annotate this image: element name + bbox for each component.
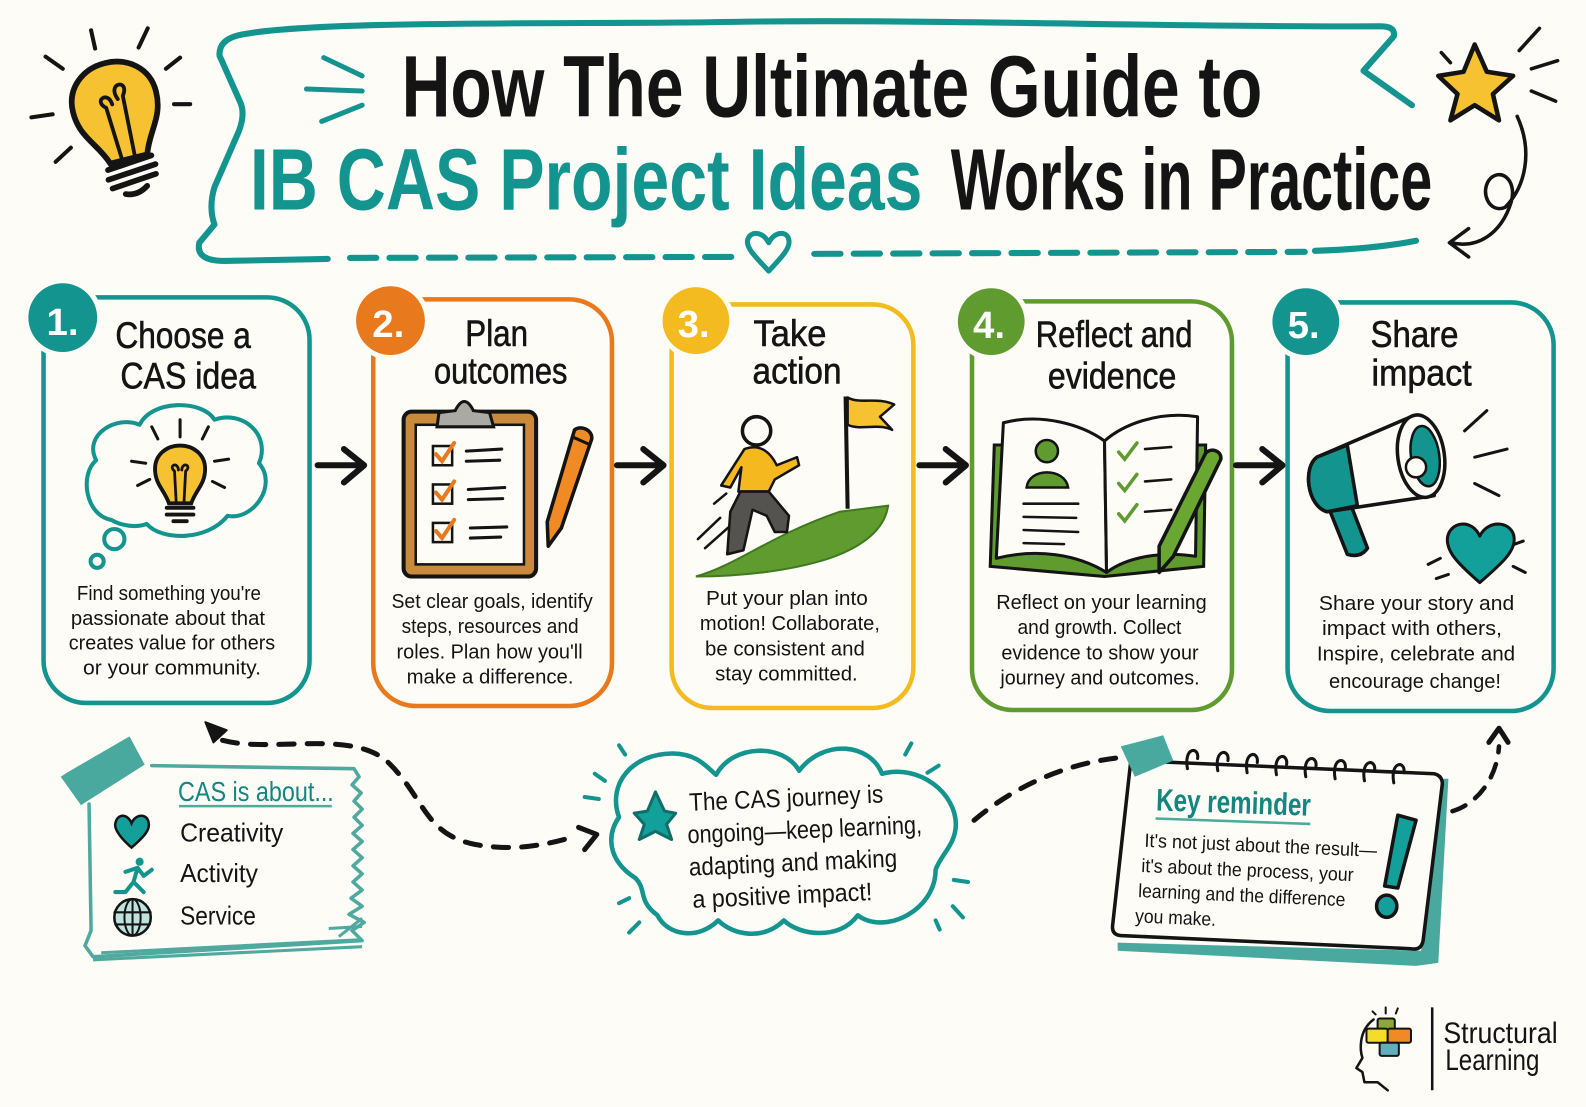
callout: CAS journey cloud xyxy=(585,743,968,934)
item: creativity: Creativity xyxy=(180,818,284,848)
arrow: dashed to key reminder xyxy=(974,758,1121,820)
step number 1 xyxy=(23,278,102,357)
logo: Structural Learning: Learning xyxy=(1445,1044,1539,1077)
logo: Structural Learning: Structural xyxy=(1443,1017,1558,1050)
heading: key reminder: Key reminder xyxy=(1156,782,1311,823)
icon: clipboard and pencil xyxy=(404,402,592,577)
item: activity xyxy=(115,858,259,892)
logo: Structural Learning xyxy=(1356,1007,1558,1090)
arrow: dashed to step 5 xyxy=(1452,728,1508,811)
text step 3: Put your plan into xyxy=(706,588,868,610)
text: reminder message: It's not just about the result— xyxy=(1144,831,1378,862)
text: journey message: ongoing—keep learning, xyxy=(687,811,923,849)
icon: exclamation mark xyxy=(1377,815,1416,917)
text step 5: encourage change! xyxy=(1329,671,1501,693)
heading step 1 xyxy=(115,314,256,396)
text: journey message: adapting and making xyxy=(688,845,898,882)
text step 2: make a difference. xyxy=(407,667,574,689)
tape xyxy=(61,736,145,805)
heading step 4: evidence xyxy=(1048,354,1176,396)
icon: star xyxy=(634,792,676,839)
panel: key reminder notebook xyxy=(1113,735,1448,966)
text step 2 xyxy=(391,591,594,689)
item: service: Service xyxy=(180,900,256,930)
icon: heart on banner xyxy=(747,233,789,271)
icon: open journal with pen xyxy=(990,415,1221,577)
text step 5: Inspire, celebrate and xyxy=(1317,643,1515,665)
text step 2: roles. Plan how you'll xyxy=(397,641,583,663)
text step 1 xyxy=(69,583,275,680)
step number 3 xyxy=(657,282,734,359)
text step 5: Share your story and xyxy=(1319,593,1514,615)
text step 2: Set clear goals, identify xyxy=(391,591,594,613)
text: reminder message: you make. xyxy=(1135,906,1216,931)
heading step 5: Share xyxy=(1371,313,1459,355)
arrow: dashed to step 1 xyxy=(205,722,597,850)
step number 1: 1. xyxy=(47,301,79,344)
text: journey message xyxy=(686,779,925,914)
step number 4 xyxy=(953,283,1030,360)
heading step 1: Choose a xyxy=(115,314,251,356)
heading step 5: impact xyxy=(1372,351,1472,393)
panel: step 4 reflect and evidence xyxy=(953,283,1232,710)
text step 5 xyxy=(1317,593,1515,693)
panel: CAS is about xyxy=(61,736,364,960)
panel: step 5 share impact xyxy=(1267,283,1554,711)
heading step 2 xyxy=(434,312,567,391)
icon: cloud rays xyxy=(585,743,968,933)
step number 4: 4. xyxy=(973,304,1005,347)
step number 5: 5. xyxy=(1288,304,1320,347)
text: reminder message xyxy=(1135,831,1378,938)
heading: CAS is about: CAS is about... xyxy=(178,776,334,807)
text step 4 xyxy=(996,592,1207,690)
text step 5: impact with others, xyxy=(1322,618,1502,640)
arrow: curl to steps xyxy=(1449,116,1526,257)
title line 1: How The Ultimate Guide to xyxy=(402,38,1262,135)
heading step 4 xyxy=(1036,313,1193,396)
icon: megaphone with heart xyxy=(1309,411,1525,583)
item: service xyxy=(114,899,256,936)
arrow: step 4 to 5 xyxy=(1236,449,1283,482)
icon: star with rays xyxy=(1438,28,1558,120)
icon: thought cloud with bulb xyxy=(87,405,266,568)
text step 3: motion! Collaborate, xyxy=(700,613,880,635)
text step 1: Find something you're xyxy=(77,583,261,605)
text step 3: be consistent and xyxy=(705,638,865,660)
icon: climber with flag on hill xyxy=(696,396,894,577)
icon: light bulb xyxy=(31,28,190,203)
heading step 3: action xyxy=(753,349,842,391)
step number 2: 2. xyxy=(372,303,404,346)
heading step 5 xyxy=(1371,313,1472,393)
tape xyxy=(1121,735,1173,777)
heading step 1: CAS idea xyxy=(120,354,256,396)
arrow: step 3 to 4 xyxy=(919,449,966,482)
title banner xyxy=(199,21,1432,271)
item: creativity xyxy=(115,816,284,848)
heading step 3 xyxy=(753,312,842,391)
panel: step 3 take action xyxy=(657,282,913,708)
text step 2: steps, resources and xyxy=(402,616,579,638)
text: reminder message: learning and the difference xyxy=(1138,881,1346,911)
text step 4: evidence to show your xyxy=(1001,642,1199,664)
text step 4: Reflect on your learning xyxy=(996,592,1207,614)
text step 4: and growth. Collect xyxy=(1018,617,1182,639)
heading step 4: Reflect and xyxy=(1036,313,1193,355)
title line 2 accent: IB CAS Project Ideas xyxy=(250,131,922,228)
spiral rings xyxy=(1187,750,1404,783)
step number 2 xyxy=(351,281,430,360)
arrow: step 1 to 2 xyxy=(318,449,364,482)
text step 4: journey and outcomes. xyxy=(999,668,1200,690)
text: reminder message: it's about the process, your xyxy=(1141,856,1355,886)
heading step 3: Take xyxy=(754,312,826,354)
heading step 2: outcomes xyxy=(434,349,567,391)
text step 3 xyxy=(700,588,880,686)
panel: step 2 plan outcomes xyxy=(351,281,612,706)
arrow: step 2 to 3 xyxy=(617,449,664,482)
text step 1: passionate about that xyxy=(71,608,265,630)
text step 1: creates value for others xyxy=(69,632,275,654)
step number 5 xyxy=(1267,283,1344,360)
text: journey message: a positive impact! xyxy=(692,878,873,914)
heading step 2: Plan xyxy=(465,312,528,354)
text: journey message: The CAS journey is xyxy=(689,780,884,817)
text step 3: stay committed. xyxy=(715,664,858,686)
item: activity: Activity xyxy=(180,858,259,888)
text step 1: or your community. xyxy=(83,658,261,680)
panel: step 1 choose a CAS idea xyxy=(23,278,310,703)
step number 3: 3. xyxy=(678,303,710,346)
icon: title rays xyxy=(307,58,362,121)
